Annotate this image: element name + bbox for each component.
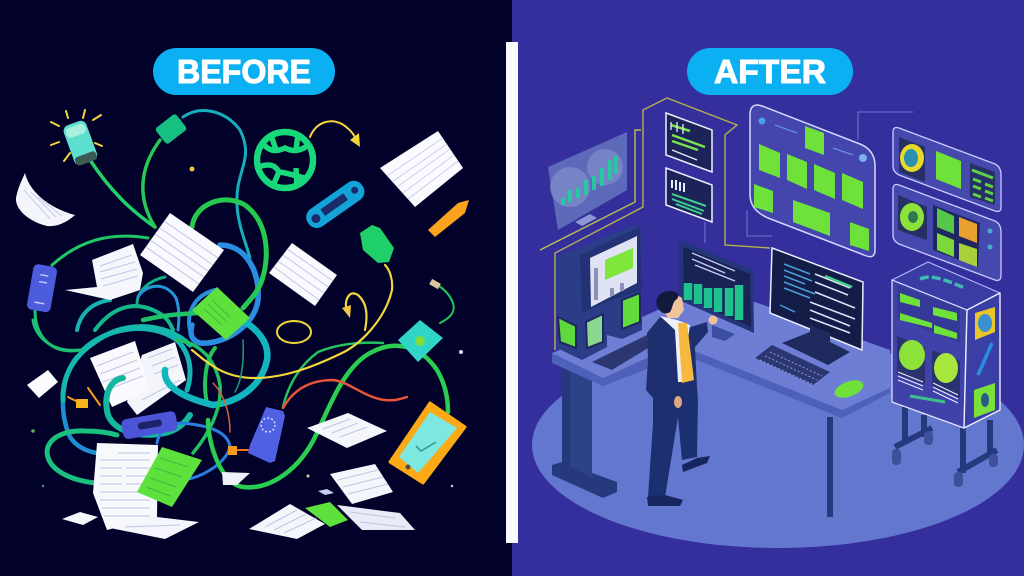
icon: green connector <box>155 113 187 145</box>
stand under chart monitor <box>712 325 735 341</box>
shoes <box>647 456 710 506</box>
rolling stand legs <box>895 407 997 473</box>
clip: blue centre <box>121 410 178 440</box>
device: orange phone <box>390 403 465 483</box>
man in suit <box>646 291 718 506</box>
desk leg <box>827 417 833 517</box>
panel: after background <box>512 0 1024 576</box>
document: folded left <box>65 244 143 300</box>
label: BEFORE: BEFORE <box>177 53 311 90</box>
shirt <box>660 316 690 382</box>
icon: green plug device <box>360 225 394 263</box>
icon: battery light <box>51 110 102 167</box>
icon: green globe <box>257 132 313 188</box>
big dashboard panel <box>750 105 875 257</box>
rolling stand body <box>892 262 1000 428</box>
label: AFTER: AFTER <box>714 53 826 90</box>
right status panel top <box>893 128 1001 212</box>
face <box>662 292 684 318</box>
monitor: green bar chart <box>679 240 754 333</box>
mouse <box>832 377 866 401</box>
icon: yellow cable arrowhead <box>342 305 351 318</box>
badge: AFTER <box>687 48 853 95</box>
hands <box>708 316 718 324</box>
monitor stand <box>782 325 850 365</box>
small plug: orange connector <box>228 446 237 455</box>
icon: orange pencil <box>428 200 469 237</box>
small plug <box>429 279 441 289</box>
scattered documents <box>27 370 415 539</box>
keyboard <box>755 345 830 385</box>
panel: before chaos illustration <box>16 110 469 539</box>
icon: blue safety pin <box>302 177 368 232</box>
documents: tangle centre <box>90 341 186 415</box>
panel: before background <box>0 0 512 576</box>
holographic chart <box>548 132 627 230</box>
sparkle dots <box>31 166 463 487</box>
keyboard left <box>592 335 648 370</box>
trousers <box>648 387 698 497</box>
panel: after workstation illustration <box>532 98 1024 548</box>
jacket <box>646 317 708 398</box>
connector lines <box>540 98 913 350</box>
note: green sticky <box>192 287 250 340</box>
document: tilted <box>269 243 337 306</box>
tie <box>678 323 694 383</box>
left cabinet <box>556 225 642 360</box>
desk: tabletop <box>552 300 890 418</box>
lower hand <box>674 396 682 408</box>
divider <box>506 42 518 543</box>
tangled cables <box>33 111 454 487</box>
document: large page <box>93 443 158 530</box>
document: centre <box>140 213 224 292</box>
badge: BEFORE <box>153 48 335 95</box>
small dark panel bottom <box>666 168 712 222</box>
small dark panel top <box>666 113 712 172</box>
device: blue box left <box>26 263 58 313</box>
rolling stand wheels <box>892 431 998 487</box>
floor ellipse <box>532 342 1024 548</box>
hair <box>656 291 678 313</box>
device: blue chip <box>248 407 285 463</box>
right status panel bottom <box>893 184 1001 280</box>
front cable strands over documents <box>106 370 213 415</box>
document: top right <box>380 131 463 207</box>
icon: yellow curved arrow <box>310 121 360 147</box>
document: curved left <box>16 173 75 226</box>
monitor: code <box>770 248 863 350</box>
note: green page <box>137 447 202 507</box>
ring: yellow cable loop <box>277 321 311 343</box>
small plug: orange <box>76 399 88 408</box>
icon: teal box <box>398 320 443 362</box>
desk: left wing pedestal <box>552 368 617 498</box>
